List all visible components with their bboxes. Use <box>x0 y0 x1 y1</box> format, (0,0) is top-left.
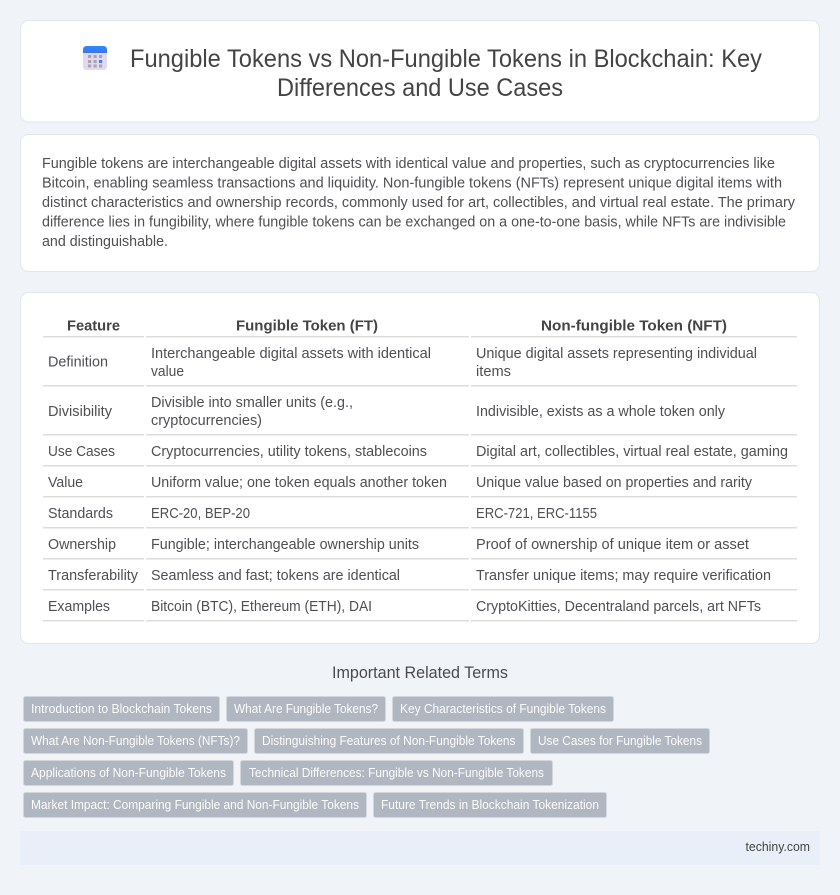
related terms tags: Use Cases for Fungible Tokens <box>538 734 702 748</box>
icon: calendar <box>83 46 107 70</box>
table header: Feature <box>67 318 120 334</box>
row: definition: items <box>476 364 511 380</box>
row: ownership <box>48 537 749 553</box>
row: examples: CryptoKitties, Decentraland parcels, art NFTs <box>476 599 761 615</box>
row: value: Value <box>48 475 83 491</box>
row: use cases: Digital art, collectibles, virtual real estate, gaming <box>476 444 788 460</box>
row: use cases: Use Cases <box>48 444 115 460</box>
related terms tags: Future Trends in Blockchain Tokenization <box>381 798 599 812</box>
row: standards: ERC-721, ERC-1155 <box>476 506 597 522</box>
row: examples: Examples <box>48 599 110 615</box>
related terms tags: Technical Differences: Fungible vs Non-Fungible Tokens <box>249 766 544 780</box>
related terms tags: Distinguishing Features of Non-Fungible Tokens <box>262 734 516 748</box>
row: transferability <box>48 568 771 584</box>
row: divisibility: Divisibility <box>48 404 113 420</box>
related terms tags: Applications of Non-Fungible Tokens <box>31 766 226 780</box>
row: ownership: Fungible; interchangeable ownership units <box>151 537 419 553</box>
intro text block: difference lies in fungibility, where fungible tokens can be exchanged on a one-to-one basis, while NFTs are indivisible <box>42 214 786 230</box>
intro text block <box>42 156 796 250</box>
intro text block: Bitcoin, enabling seamless transactions and liquidity. Non-fungible tokens (NFTs) represent unique digital items with <box>42 176 782 192</box>
row: ownership: Proof of ownership of unique item or asset <box>476 537 749 553</box>
table header: Non-fungible Token (NFT) <box>541 318 727 334</box>
table header <box>67 318 727 334</box>
intro text block: distinct characteristics and ownership records, commonly used for art, collectibles, and virtual real estate. The primary <box>42 195 796 211</box>
row: use cases: Cryptocurrencies, utility tokens, stablecoins <box>151 444 427 460</box>
related terms tags: Market Impact: Comparing Fungible and Non-Fungible Tokens <box>31 798 359 812</box>
row: standards: Standards <box>48 506 113 522</box>
row: definition: Unique digital assets representing individual <box>476 346 757 362</box>
header panel <box>20 20 820 122</box>
row: value: Uniform value; one token equals another token <box>151 475 447 491</box>
row: transferability: Transferability <box>48 568 139 584</box>
related terms tags <box>24 696 710 818</box>
row: definition: Definition <box>48 354 108 370</box>
panel: comparison table <box>20 292 820 644</box>
row: ownership: Ownership <box>48 537 116 553</box>
row: transferability: Transfer unique items; may require verification <box>476 568 771 584</box>
row: standards <box>48 506 597 522</box>
row: value: Unique value based on properties and rarity <box>476 475 753 491</box>
related terms tags: Introduction to Blockchain Tokens <box>31 702 212 716</box>
table header: Fungible Token (FT) <box>236 318 378 334</box>
intro text block: and distinguishable. <box>42 234 168 250</box>
heading: important related terms: Important Related Terms <box>332 664 508 682</box>
row: standards: ERC-20, BEP-20 <box>151 506 250 522</box>
related terms tags: Key Characteristics of Fungible Tokens <box>400 702 606 716</box>
row: divisibility: Indivisible, exists as a whole token only <box>476 404 726 420</box>
title <box>130 46 763 102</box>
row: use cases <box>48 444 788 460</box>
related terms tags: What Are Non-Fungible Tokens (NFTs)? <box>31 734 240 748</box>
row: definition: value <box>151 364 184 380</box>
row: definition: Interchangeable digital assets with identical <box>151 346 431 362</box>
related terms tags: What Are Fungible Tokens? <box>234 702 378 716</box>
row: examples <box>48 599 761 615</box>
title: Fungible Tokens vs Non-Fungible Tokens in Blockchain: Key <box>130 46 763 73</box>
row: examples: Bitcoin (BTC), Ethereum (ETH), DAI <box>151 599 372 615</box>
footer <box>20 831 820 865</box>
row: definition <box>48 346 757 380</box>
panel: intro <box>20 134 820 272</box>
footer source: techiny.com <box>746 839 810 854</box>
row: divisibility: cryptocurrencies) <box>151 413 262 429</box>
intro text block: Fungible tokens are interchangeable digital assets with identical value and properties, such as cryptocurrencies like <box>42 156 775 172</box>
row: transferability: Seamless and fast; tokens are identical <box>151 568 400 584</box>
title: Differences and Use Cases <box>277 75 563 102</box>
row: value <box>48 475 753 491</box>
row: divisibility: Divisible into smaller units (e.g., <box>151 395 353 411</box>
row: divisibility <box>48 395 726 429</box>
